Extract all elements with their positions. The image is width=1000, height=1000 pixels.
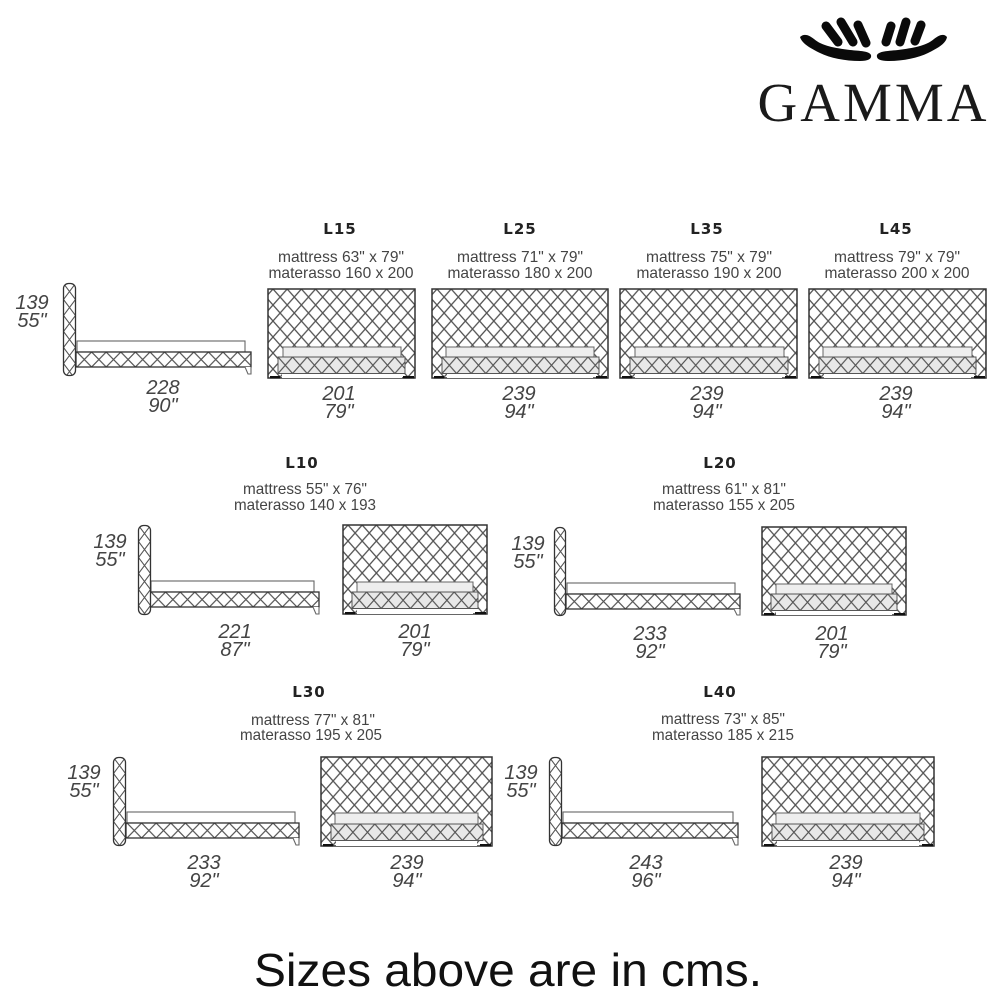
length: 228 xyxy=(145,377,180,399)
mattress size xyxy=(653,481,795,514)
length: 243 xyxy=(628,852,663,874)
length xyxy=(217,621,252,661)
width xyxy=(389,852,424,892)
width xyxy=(501,383,536,423)
mattress size: mattress 75" x 79" xyxy=(646,249,772,266)
headboard height xyxy=(504,762,538,802)
panel: L30 xyxy=(67,683,492,892)
width: 239 xyxy=(689,383,724,405)
width xyxy=(814,623,849,663)
mattress size: mattress 77" x 81" xyxy=(251,712,375,729)
headboard height: 139 xyxy=(15,292,49,314)
headboard height xyxy=(67,762,101,802)
mattress size xyxy=(652,711,794,744)
front drawing xyxy=(809,289,986,378)
panel: L25 xyxy=(432,220,608,423)
mattress size xyxy=(240,712,382,744)
heading L15: L15 xyxy=(323,220,357,238)
mattress size xyxy=(824,249,970,282)
icon: hands emblem xyxy=(800,22,947,61)
side drawing xyxy=(554,528,740,616)
width: 239 xyxy=(389,852,424,874)
width xyxy=(689,383,724,423)
heading L20: L20 xyxy=(703,454,737,472)
headboard height xyxy=(15,292,49,332)
width: 94" xyxy=(692,401,723,423)
mattress size: mattress 63" x 79" xyxy=(278,249,404,266)
side drawing xyxy=(550,758,738,846)
width: 94" xyxy=(392,870,423,892)
mattress size: materasso 195 x 205 xyxy=(240,727,382,744)
headboard height: 139 xyxy=(511,533,545,555)
width: 94" xyxy=(504,401,535,423)
headboard height: 139 xyxy=(504,762,538,784)
front drawing xyxy=(432,289,608,378)
mattress size xyxy=(234,481,376,514)
front drawing xyxy=(762,757,934,846)
side drawing xyxy=(138,526,319,614)
headboard height: 55" xyxy=(17,310,48,332)
panel: L15 xyxy=(268,220,415,423)
mattress size: materasso 200 x 200 xyxy=(824,265,970,282)
panel: L45 xyxy=(809,220,986,423)
length: 87" xyxy=(220,639,251,661)
width: 79" xyxy=(400,639,431,661)
length xyxy=(628,852,663,892)
heading L40: L40 xyxy=(703,683,737,701)
mattress size: materasso 185 x 215 xyxy=(652,727,794,744)
panel: L40 xyxy=(504,683,934,892)
width: 201 xyxy=(321,383,356,405)
heading L30: L30 xyxy=(292,683,326,701)
width xyxy=(321,383,356,423)
mattress size xyxy=(268,249,414,282)
length: 233 xyxy=(632,623,667,645)
width: 94" xyxy=(881,401,912,423)
mattress size: materasso 160 x 200 xyxy=(268,265,414,282)
length xyxy=(145,377,180,417)
panel: L20 xyxy=(511,454,906,663)
heading L35: L35 xyxy=(690,220,724,238)
width: 239 xyxy=(501,383,536,405)
length xyxy=(186,852,221,892)
width xyxy=(878,383,913,423)
mattress size: mattress 79" x 79" xyxy=(834,249,960,266)
mattress size: materasso 140 x 193 xyxy=(234,497,376,514)
mattress size: materasso 180 x 200 xyxy=(448,265,593,282)
length: 233 xyxy=(186,852,221,874)
side drawing xyxy=(64,284,251,376)
length: 90" xyxy=(148,395,179,417)
headboard height xyxy=(511,533,545,573)
headboard height xyxy=(93,531,127,571)
panel: L10 xyxy=(93,454,487,661)
logo wordmark: GAMMA xyxy=(758,72,987,133)
width: 79" xyxy=(817,641,848,663)
front drawing xyxy=(268,289,415,378)
headboard height: 139 xyxy=(93,531,127,553)
logo: GAMMA xyxy=(758,22,987,133)
headboard height: 55" xyxy=(506,780,537,802)
length: 221 xyxy=(217,621,252,643)
mattress size: materasso 155 x 205 xyxy=(653,497,795,514)
width: 239 xyxy=(878,383,913,405)
front drawing xyxy=(620,289,797,378)
mattress size: mattress 71" x 79" xyxy=(457,249,583,266)
footer note: Sizes above are in cms. xyxy=(254,944,762,996)
width xyxy=(828,852,863,892)
length: 92" xyxy=(635,641,666,663)
headboard height: 55" xyxy=(513,551,544,573)
headboard height: 139 xyxy=(67,762,101,784)
width xyxy=(397,621,432,661)
length xyxy=(632,623,667,663)
heading L45: L45 xyxy=(879,220,913,238)
front drawing xyxy=(762,527,906,616)
front drawing xyxy=(343,525,487,614)
length: 92" xyxy=(189,870,220,892)
panel: side view top row xyxy=(15,284,251,417)
side drawing xyxy=(114,758,299,846)
heading L10: L10 xyxy=(285,454,319,472)
width: 239 xyxy=(828,852,863,874)
heading L25: L25 xyxy=(503,220,537,238)
mattress size: mattress 55" x 76" xyxy=(243,481,367,498)
width: 94" xyxy=(831,870,862,892)
panel: L35 xyxy=(620,220,797,423)
headboard height: 55" xyxy=(69,780,100,802)
width: 79" xyxy=(324,401,355,423)
headboard height: 55" xyxy=(95,549,126,571)
mattress size: materasso 190 x 200 xyxy=(636,265,782,282)
length: 96" xyxy=(631,870,662,892)
width: 201 xyxy=(814,623,849,645)
mattress size: mattress 73" x 85" xyxy=(661,711,785,728)
mattress size: mattress 61" x 81" xyxy=(662,481,786,498)
front drawing xyxy=(321,757,492,846)
mattress size xyxy=(636,249,782,282)
width: 201 xyxy=(397,621,432,643)
mattress size xyxy=(448,249,593,282)
